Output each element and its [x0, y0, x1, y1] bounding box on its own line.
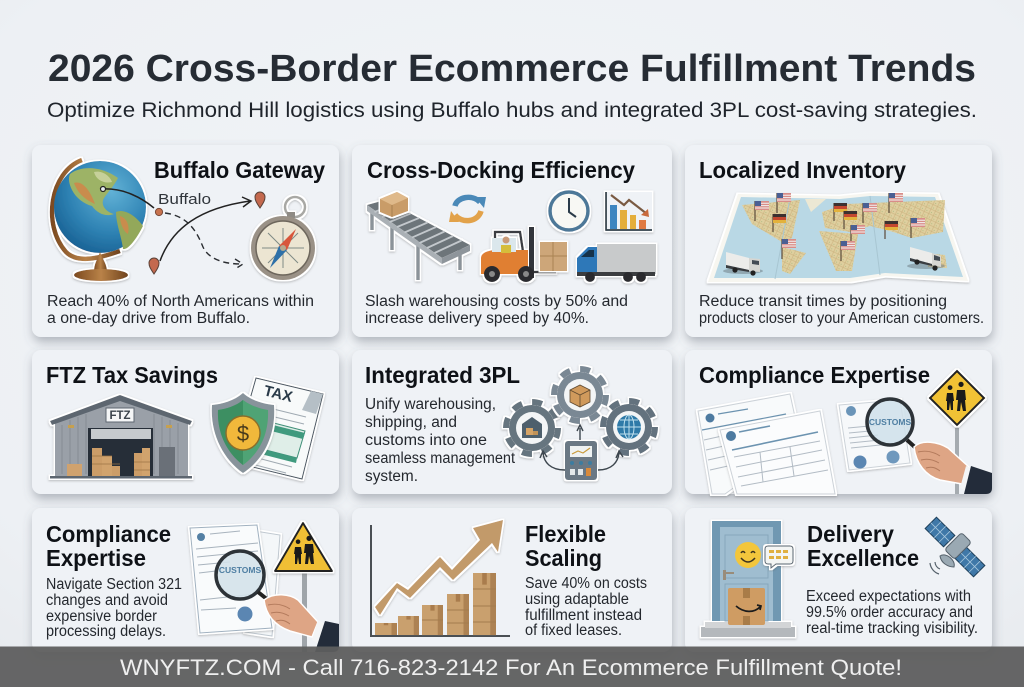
icon: box on conveyor [380, 192, 408, 217]
icon: gear globe [603, 401, 655, 453]
footer call-to-action: WNYFTZ.COM - Call 716-823-2142 For An Ecommerce Fulfillment Quote! [120, 655, 902, 680]
icon: declining bar chart [606, 192, 652, 231]
panel: Integrated 3PL: customs into one [365, 432, 487, 449]
icon: FTZ warehouse [50, 395, 192, 478]
panel: Delivery Excellence: real-time tracking visibility. [806, 620, 978, 637]
text block: Exceed expectations with [806, 588, 971, 605]
panel: Cross-Docking Efficiency [352, 145, 672, 337]
icon: globe [52, 160, 146, 281]
panel: Compliance Expertise (top) [685, 350, 992, 494]
heading: Cross-Docking Efficiency: Cross-Docking Efficiency [367, 157, 635, 183]
icon: clock [550, 192, 588, 230]
flags [754, 193, 925, 261]
icon: door with package [701, 521, 795, 637]
heading: Flexible Scaling: Flexible [525, 521, 606, 547]
text block: Unify warehousing, [365, 396, 496, 413]
icon: conveyor [367, 200, 470, 280]
icon: compass [251, 197, 315, 280]
icon: warning sign [930, 371, 984, 494]
icon: shield with dollar: $ [237, 421, 249, 446]
heading: Compliance Expertise: Compliance [46, 521, 171, 547]
icon: tax document: TAX [262, 382, 294, 406]
panel: Compliance Expertise (bottom): changes and avoid [46, 592, 168, 609]
icon: magnifier and hand [867, 399, 992, 494]
icon: customs forms [190, 525, 280, 636]
text block: Navigate Section 321 [46, 576, 182, 593]
panel: Cross-Docking Efficiency: increase delivery speed by 40%. [365, 310, 589, 327]
icon: smiley [735, 542, 761, 568]
bars: box stacks [375, 573, 496, 635]
icon: sync arrows [455, 197, 481, 221]
text block: Save 40% on costs [525, 575, 647, 592]
text block: Reach 40% of North Americans within [47, 293, 314, 310]
panel: Compliance Expertise (bottom): expensive border [46, 608, 157, 625]
panel: Integrated 3PL: shipping, and [365, 414, 457, 431]
panel: Delivery Excellence [685, 508, 992, 652]
arrow: solid route [160, 197, 251, 261]
icon: warning triangle [275, 523, 332, 652]
icon: customs letter [839, 400, 910, 470]
heading: Delivery Excellence: Delivery [807, 521, 894, 547]
panel: Delivery Excellence: 99.5% order accuracy and [806, 604, 973, 621]
panel: Buffalo Gateway [32, 145, 339, 337]
icon: tax document [232, 378, 323, 479]
heading: FTZ Tax Savings: FTZ Tax Savings [46, 362, 218, 388]
panel: Flexible Scaling: of fixed leases. [525, 622, 622, 639]
truck right [907, 247, 945, 271]
arrow: dashed route [165, 213, 243, 269]
panel: Buffalo Gateway: a one-day drive from Buffalo. [47, 310, 250, 327]
heading: Integrated 3PL: Integrated 3PL [365, 362, 520, 388]
panel: Flexible Scaling: Scaling [525, 545, 602, 571]
panel: Flexible Scaling [352, 508, 672, 652]
panel: Delivery Excellence: Excellence [807, 545, 919, 571]
panel: Integrated 3PL [352, 350, 672, 494]
panel: Compliance Expertise (bottom): Expertise [46, 545, 146, 571]
icon: gear box [554, 369, 606, 421]
icon: shield with dollar [212, 393, 274, 473]
marker: Buffalo dot [155, 208, 163, 216]
heading: Buffalo Gateway: Buffalo Gateway [154, 157, 325, 183]
text block: Reduce transit times by positioning [699, 293, 947, 310]
panel: Flexible Scaling: using adaptable [525, 591, 629, 608]
icon: satellite [925, 517, 985, 577]
truck left [723, 252, 763, 276]
footer call-to-action [0, 646, 1024, 687]
heading: Localized Inventory: Localized Inventory [699, 157, 906, 183]
arrow: growth [375, 520, 503, 615]
panel: Compliance Expertise (bottom) [32, 508, 339, 652]
icon: map pins [149, 192, 265, 274]
chart: growth boxes and arrow [371, 520, 510, 636]
map with flags and trucks [708, 193, 968, 282]
arrows: dashboard to gears [540, 425, 623, 470]
panel: FTZ Tax Savings [32, 350, 339, 494]
panel: Integrated 3PL: system. [365, 468, 418, 485]
subtitle: Optimize Richmond Hill logistics using Buffalo hubs and integrated 3PL cost-saving strategies. [47, 99, 977, 122]
icon: rating speech bubble [765, 546, 793, 568]
arrow: globe to Buffalo [103, 189, 154, 208]
panel: Flexible Scaling: fulfillment instead [525, 607, 642, 624]
icon: magnifier and hand: CUSTOMS [869, 417, 911, 427]
icon: delivery truck [577, 244, 656, 282]
icon: customs forms [698, 394, 835, 494]
text block: Slash warehousing costs by 50% and [365, 293, 628, 310]
heading: Compliance Expertise: Compliance Expertise [699, 362, 930, 388]
icon: amazon-style package [728, 588, 765, 625]
panel: Compliance Expertise (bottom): processing delays. [46, 623, 166, 640]
panel: Localized Inventory [685, 145, 992, 337]
icon: magnifier and hand [216, 551, 339, 652]
panel: Integrated 3PL: seamless management [365, 450, 516, 467]
panel: Localized Inventory: products closer to your American customers. [699, 310, 984, 327]
icon: forklift pallet boxes [540, 242, 567, 271]
icon: FTZ warehouse: FTZ [109, 410, 131, 422]
icon: calculator dashboard [565, 441, 597, 480]
title: 2026 Cross-Border Ecommerce Fulfillment Trends [48, 48, 976, 90]
icon: forklift [481, 227, 556, 282]
icon: gear warehouse [506, 402, 558, 454]
label: Buffalo: Buffalo [158, 191, 211, 208]
icon: magnifier and hand: CUSTOMS [219, 565, 261, 575]
